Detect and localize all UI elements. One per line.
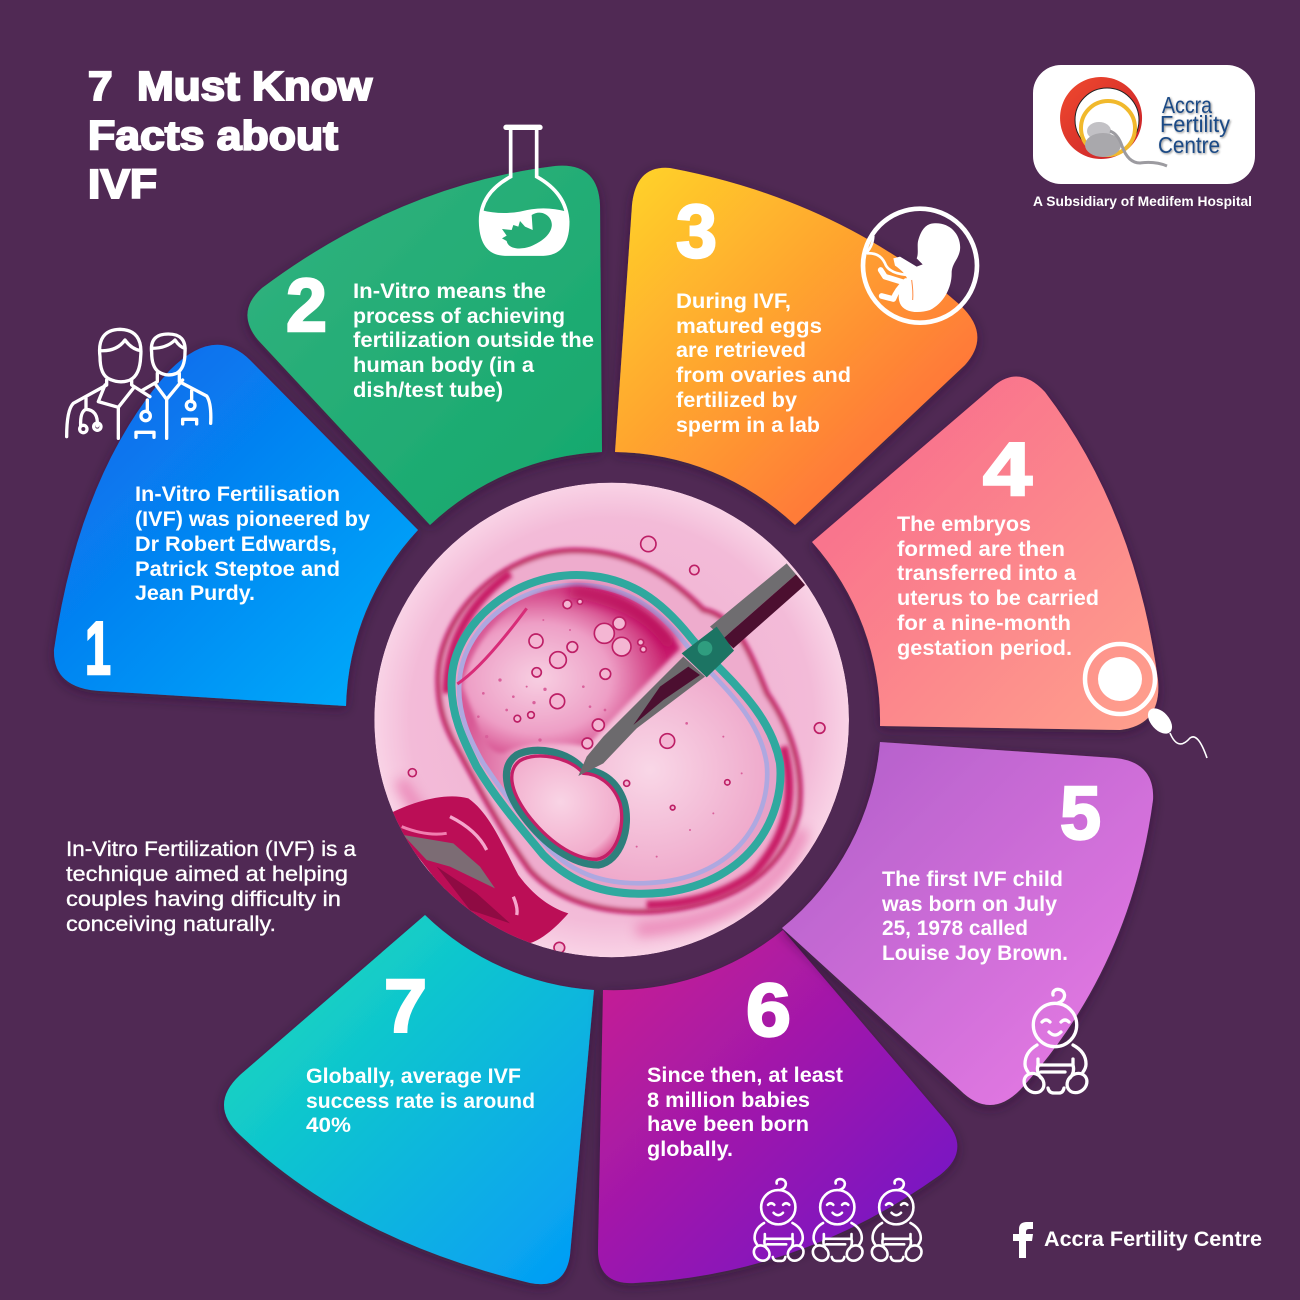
panel: fact 5: 25, 1978 called [882, 916, 1028, 940]
intro text: In-Vitro Fertilization (IVF) is a [66, 837, 356, 861]
crimson corner [390, 796, 568, 945]
panel: fact 6 [598, 930, 957, 1283]
panel: fact 4: uterus to be carried [897, 586, 1099, 610]
panel: fact 3: matured eggs [676, 314, 822, 338]
outer membrane [438, 551, 800, 911]
icon: facebook [1013, 1222, 1033, 1258]
icon: three babies [751, 1179, 925, 1264]
panel: fact 3: are retrieved [676, 338, 806, 362]
pipette needle [578, 657, 705, 776]
panel: fact 2: In-Vitro means the [353, 279, 546, 303]
embryo fill [459, 585, 767, 883]
logo text: Accra [1162, 92, 1212, 118]
icon: egg and sperm [1085, 644, 1207, 758]
panel: fact 2: fertilization outside the [353, 328, 594, 352]
panel: fact 6: globally. [647, 1137, 733, 1161]
heart-shaped body [507, 750, 626, 865]
panel: fact 1: In-Vitro Fertilisation [135, 482, 340, 506]
panel: fact 1 [54, 329, 418, 706]
panel: fact 4 [812, 376, 1207, 758]
panel: fact 5: 5 [1060, 771, 1101, 855]
panel: fact 3: 3 [676, 189, 717, 273]
upper chamber [463, 587, 680, 753]
title: Facts about [88, 112, 338, 158]
stippled granules [477, 619, 743, 858]
title [88, 63, 372, 207]
teal zona ring [452, 575, 781, 894]
panel: fact 2: human body (in a [353, 353, 535, 377]
icon: baby [1020, 989, 1091, 1097]
panel: fact 3: from ovaries and [676, 363, 851, 387]
panel: fact 4: transferred into a [897, 561, 1077, 585]
panel: fact 7: Globally, average IVF [306, 1064, 521, 1088]
panel: fact 3: sperm in a lab [676, 413, 820, 437]
logo card [1033, 65, 1255, 184]
panel: fact 6: Since then, at least [647, 1063, 843, 1087]
panel: fact 2: process of achieving [353, 304, 565, 328]
panel: fact 7 [224, 915, 594, 1284]
subsidiary caption: A Subsidiary of Medifem Hospital [1033, 194, 1252, 209]
central image: embryo micro-injection [374, 483, 849, 957]
intro text [66, 837, 356, 936]
panel: fact 2: dish/test tube) [353, 378, 503, 402]
panel: fact 1: Jean Purdy. [135, 581, 255, 605]
panel: fact 3 [615, 168, 977, 525]
intro text: conceiving naturally. [66, 912, 276, 936]
panel: fact 1: (IVF) was pioneered by [135, 507, 370, 531]
logo text: Centre [1158, 132, 1220, 158]
footer: facebook handle [1013, 1222, 1262, 1258]
bubbles [408, 536, 825, 953]
panel: fact 7: success rate is around [306, 1089, 535, 1113]
panel: fact 6: 6 [746, 968, 791, 1052]
panel: fact 5: Louise Joy Brown. [882, 941, 1068, 965]
logo text: Fertility [1160, 111, 1230, 137]
panel: fact 4: 4 [983, 427, 1032, 511]
logo text [1158, 92, 1230, 158]
panel: fact 1: Patrick Steptoe and [135, 557, 340, 581]
panel: fact 5: was born on July [881, 892, 1057, 916]
panel: fact 2: 2 [286, 263, 327, 347]
title: IVF [88, 161, 157, 207]
panel: fact 5: The first IVF child [882, 867, 1063, 891]
panel: fact 6: have been born [647, 1112, 809, 1136]
icon: fetus in circle [863, 209, 977, 323]
panel: fact 4: formed are then [897, 537, 1065, 561]
icon: logo rings [1060, 77, 1167, 166]
icon: flask with fetus [481, 125, 568, 254]
icon: two doctors [67, 329, 211, 438]
intro text: technique aimed at helping [66, 862, 348, 886]
title: 7 Must Know [88, 63, 372, 109]
panel: fact 3: fertilized by [676, 388, 797, 412]
intro text: couples having difficulty in [66, 887, 341, 911]
panel: fact 4: The embryos [897, 512, 1031, 536]
panel: fact 3: During IVF, [676, 289, 791, 313]
panel: fact 4: gestation period. [897, 636, 1072, 660]
panel: fact 1: 1 [85, 606, 111, 690]
footer: facebook handle: Accra Fertility Centre [1044, 1227, 1262, 1251]
panel: fact 5 [782, 742, 1153, 1105]
panel: fact 1: Dr Robert Edwards, [135, 532, 337, 556]
panel: fact 7: 40% [306, 1113, 351, 1137]
panel: fact 6: 8 million babies [647, 1088, 810, 1112]
panel: fact 4: for a nine-month [897, 611, 1071, 635]
panel: fact 7: 7 [384, 964, 427, 1048]
panel: fact 2 [247, 125, 602, 525]
